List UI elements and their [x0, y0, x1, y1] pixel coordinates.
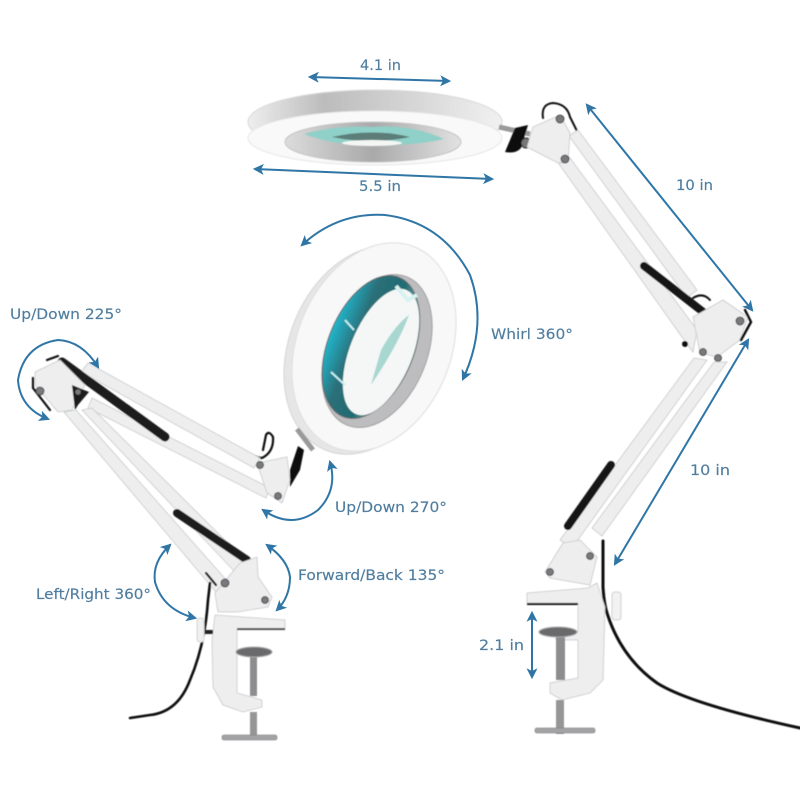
rotation arrow: forward/back 135 [267, 545, 290, 610]
top hinge connector [499, 103, 578, 152]
dimension arrow: 4.1 in [310, 77, 449, 81]
power cable [130, 583, 210, 718]
dimension label: upper arm 10 in: 10 in [676, 178, 713, 194]
rotation label: up/down 270: Up/Down 270° [335, 500, 447, 516]
top joint plate [527, 115, 570, 163]
rotation arrow: whirl 360 [302, 215, 478, 379]
dimension arrow: upper arm 10 in [587, 105, 752, 310]
rotation arrow: left/right 360 [155, 545, 195, 618]
lower arm bars [64, 408, 247, 592]
right joint plate [256, 457, 290, 503]
lamp: top view with ring head and folded arm [248, 90, 800, 734]
rotation label: forward/back 135: Forward/Back 135° [298, 568, 445, 584]
rotation label: whirl 360: Whirl 360° [491, 327, 573, 343]
rotation arrow: up/down 270 [263, 462, 332, 520]
base plate [215, 557, 272, 612]
dimension label: 4.1 in: 4.1 in [360, 58, 401, 74]
lower arm bars [560, 358, 727, 548]
upper arm spring [62, 362, 165, 437]
dimension label: lower arm 10 in: 10 in [690, 463, 730, 479]
magnifier ring seen from below [248, 90, 502, 165]
desk clamp [527, 583, 621, 734]
lower arm spring [177, 513, 247, 560]
head connector [245, 429, 313, 487]
upper arm bars [559, 130, 697, 352]
dimension arrow: 5.5 in [255, 169, 492, 179]
upper arm bars [81, 363, 270, 498]
base plate [545, 540, 597, 585]
shoulder joint plate [33, 356, 89, 412]
rotation arrow: up/down 225 [18, 340, 98, 419]
dimension arrow: clamp 2.1 in [531, 613, 533, 677]
rotation label: up/down 225: Up/Down 225° [10, 307, 122, 323]
desk clamp [197, 615, 285, 740]
elbow joint plate [682, 295, 751, 362]
dimension arrow: lower arm 10 in [615, 340, 748, 564]
dimension label: clamp 2.1 in: 2.1 in [479, 638, 524, 654]
power cable [603, 541, 800, 728]
lamp: angled view with round head and bent arm [33, 218, 486, 740]
dimension label: 5.5 in: 5.5 in [359, 179, 401, 195]
magnifier ring facing forward [254, 218, 486, 479]
rotation label: left/right 360: Left/Right 360° [36, 587, 151, 603]
upper arm spring [644, 266, 707, 315]
lower arm spring [568, 465, 611, 526]
